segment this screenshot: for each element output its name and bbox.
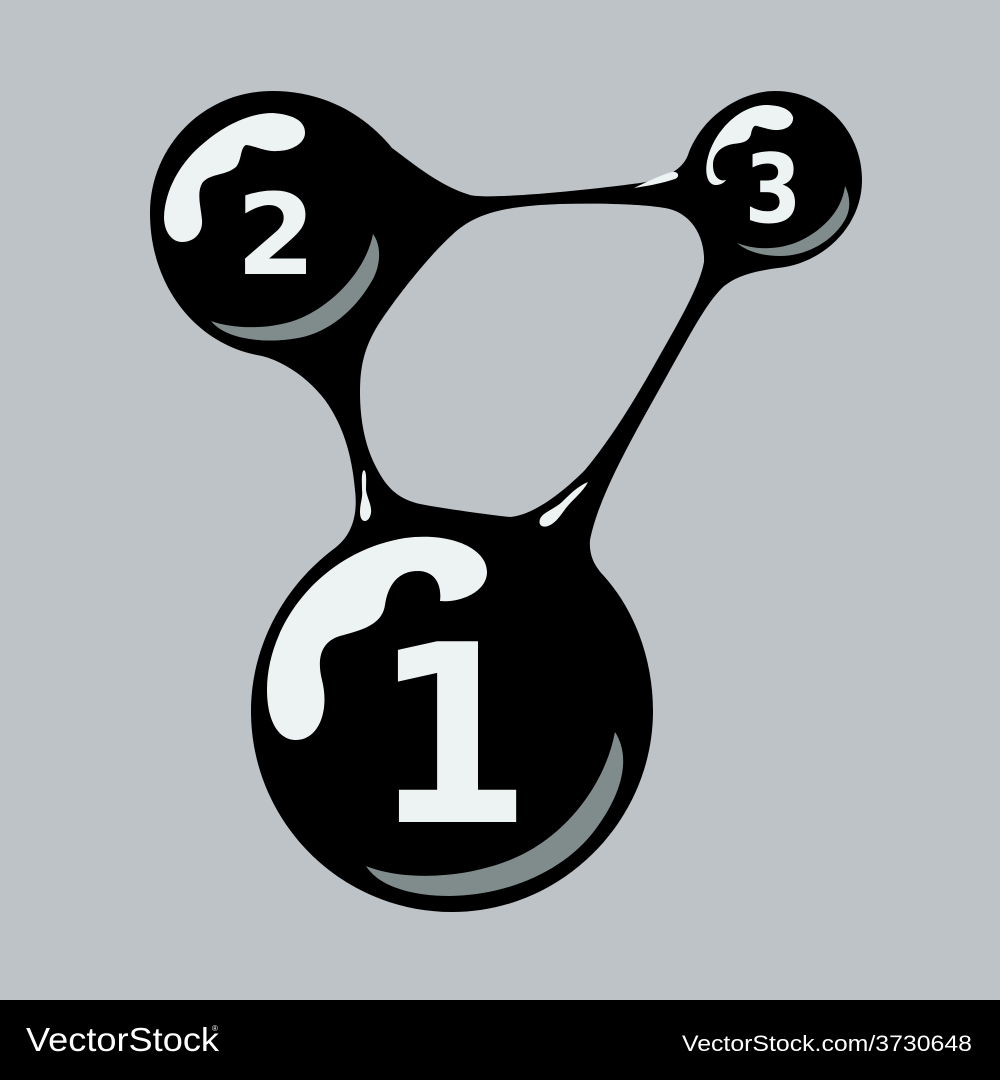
- small highlight: right link: [539, 482, 588, 527]
- molecule body with three linked spheres: [150, 91, 862, 912]
- sphere 1 lower reflection: [366, 732, 623, 896]
- number 2: 2: [236, 171, 316, 301]
- small highlight: left link: [360, 470, 371, 521]
- sphere 1 highlight: [267, 537, 487, 740]
- number 1: 1: [372, 593, 532, 881]
- sphere 3 lower reflection: [737, 186, 849, 256]
- watermark bar: [0, 1000, 1000, 1080]
- registered mark: ®: [212, 1024, 218, 1033]
- watermark brand: VectorStock: [26, 1022, 219, 1059]
- number 3: 3: [744, 135, 802, 245]
- watermark url: VectorStock.com/3730648: [682, 1031, 972, 1056]
- small highlight: top link: [634, 172, 678, 188]
- sphere 3 highlight: [706, 105, 793, 185]
- sphere 2 highlight: [164, 113, 305, 242]
- sphere 2 lower reflection: [211, 234, 379, 341]
